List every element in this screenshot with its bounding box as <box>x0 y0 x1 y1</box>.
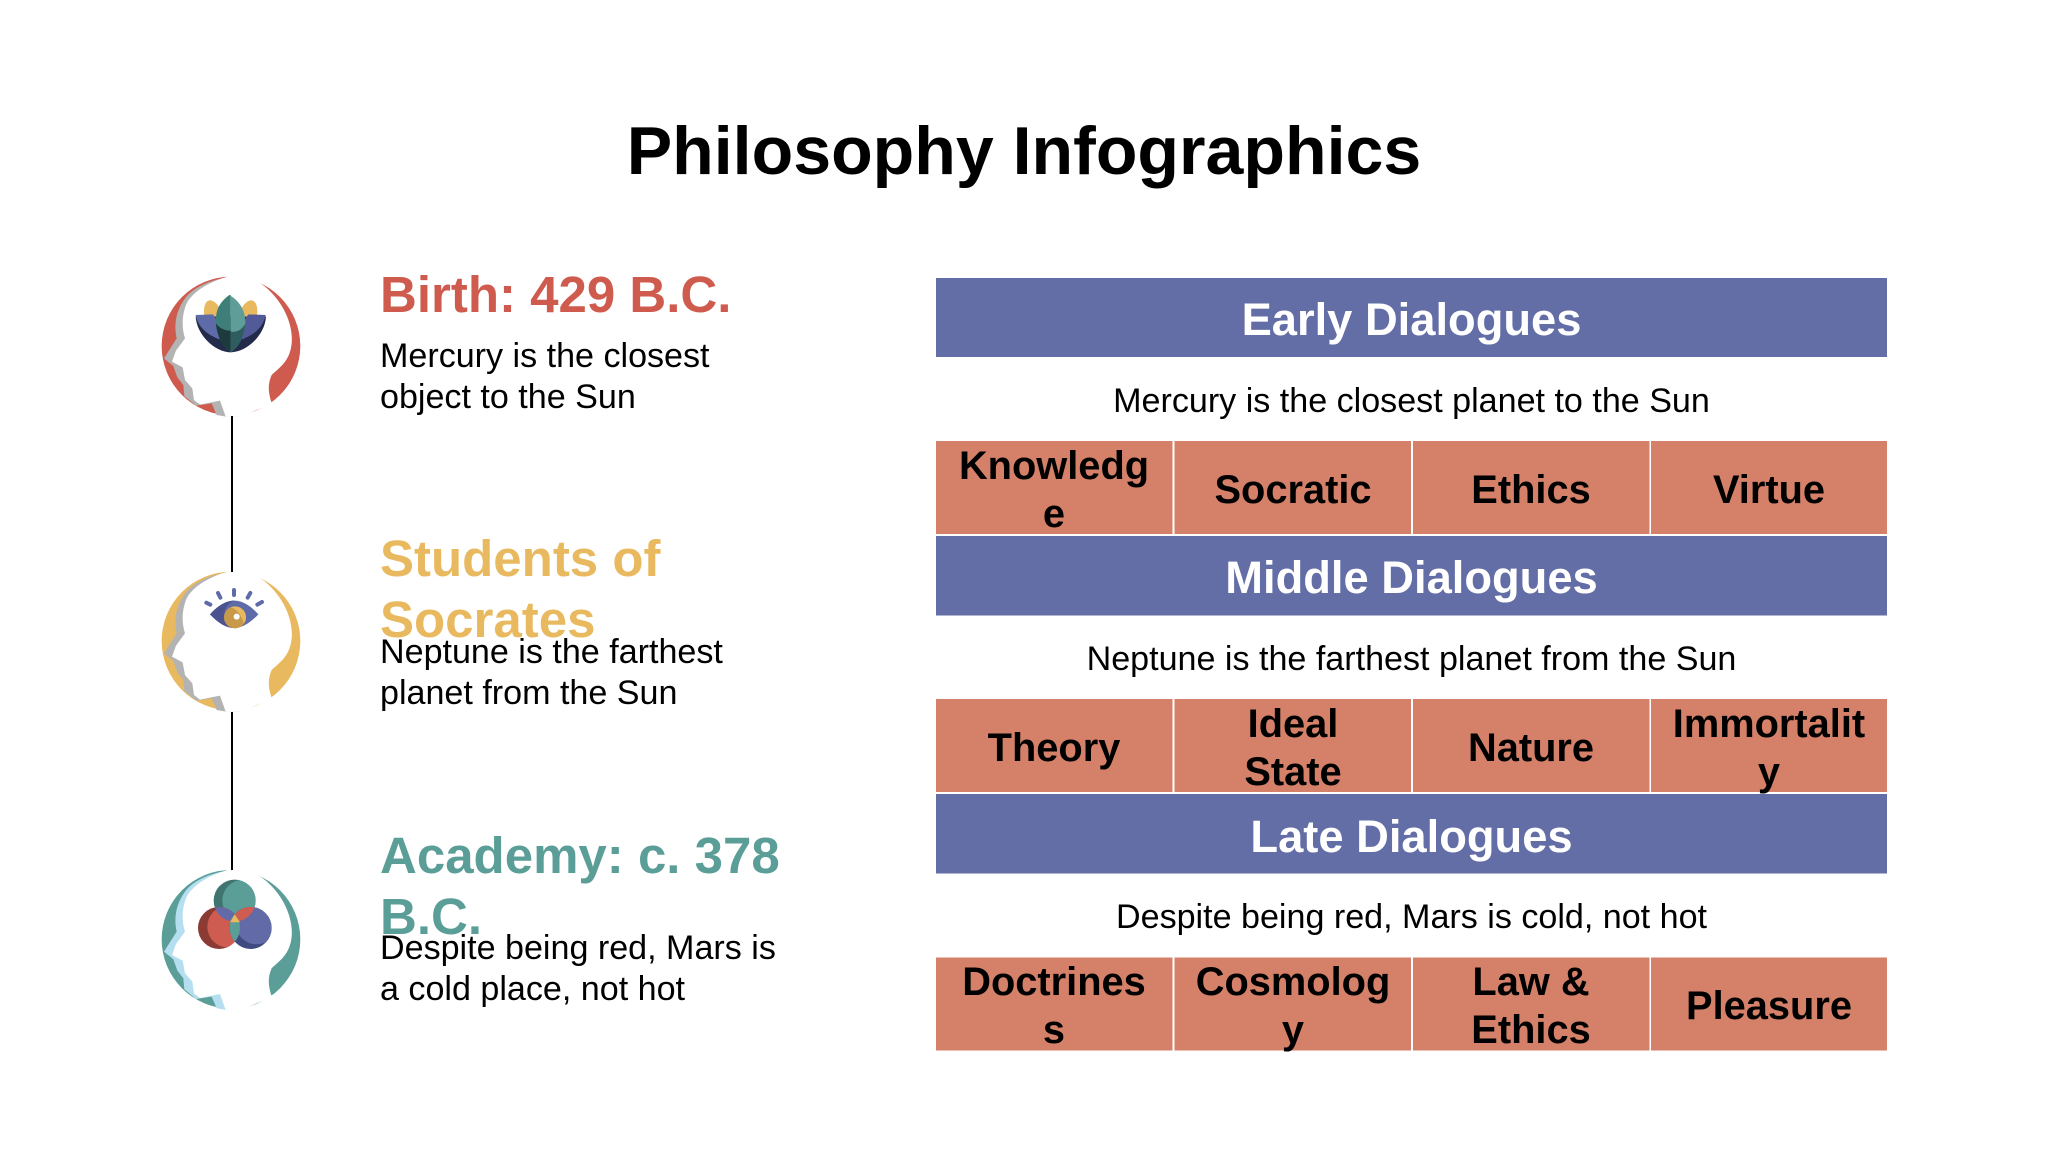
topic cells: early dialogues: Socratic <box>1214 468 1372 512</box>
topic cells: middle dialogues: Ideal <box>1248 702 1338 746</box>
text block: academy <box>380 827 780 1008</box>
text block: students of Socrates <box>380 530 723 712</box>
topic cells: late dialogues: Law & <box>1472 960 1590 1004</box>
text block: students of Socrates: Socrates <box>380 591 595 648</box>
topic cells: middle dialogues <box>936 699 1887 794</box>
heading band: early dialogues: Early Dialogues <box>1242 294 1581 345</box>
topic cells: late dialogues <box>936 958 1887 1052</box>
topic cells: middle dialogues: State <box>1244 750 1342 794</box>
panel: early dialogues <box>936 278 1887 536</box>
topic cells: late dialogues: Pleasure <box>1686 984 1852 1028</box>
title: Philosophy Infographics <box>627 113 1421 189</box>
description: middle dialogues: Neptune is the farthest planet from the Sun <box>1087 640 1736 678</box>
heading band: early dialogues <box>936 278 1887 357</box>
topic cells: early dialogues: Knowledg <box>959 444 1149 488</box>
topic cells: early dialogues: e <box>1043 492 1065 536</box>
text block: students of Socrates: planet from the Sun <box>380 674 677 712</box>
topic cells: late dialogues: Cosmolog <box>1196 960 1390 1004</box>
icon: head with lotus <box>162 275 300 417</box>
panel: middle dialogues <box>936 536 1887 794</box>
text block: birth: Birth: 429 B.C. <box>380 266 731 323</box>
topic cells: middle dialogues: Theory <box>988 726 1120 770</box>
text block: academy: B.C. <box>380 888 482 945</box>
panel: late dialogues <box>936 794 1887 1052</box>
text block: birth: Mercury is the closest <box>380 337 710 375</box>
text block: birth <box>380 266 731 416</box>
description: early dialogues: Mercury is the closest planet to the Sun <box>1113 382 1710 420</box>
topic cells: late dialogues: y <box>1282 1008 1304 1052</box>
topic cells: late dialogues: Doctrines <box>962 960 1146 1004</box>
heading band: late dialogues: Late Dialogues <box>1250 811 1573 862</box>
icon: head with eye <box>162 570 300 712</box>
heading band: middle dialogues: Middle Dialogues <box>1225 552 1598 603</box>
text block: students of Socrates: Students of <box>380 530 661 587</box>
topic cells: early dialogues: Virtue <box>1713 468 1825 512</box>
heading band: middle dialogues <box>936 536 1887 616</box>
topic cells: middle dialogues: Nature <box>1468 726 1594 770</box>
text block: academy: a cold place, not hot <box>380 970 686 1008</box>
text block: students of Socrates: Neptune is the farthest <box>380 633 723 671</box>
text block: academy: Despite being red, Mars is <box>380 929 776 967</box>
timeline connector: birth to students <box>231 416 233 572</box>
description: late dialogues: Despite being red, Mars is cold, not hot <box>1116 898 1708 936</box>
text block: birth: object to the Sun <box>380 378 636 416</box>
topic cells: middle dialogues: Immortalit <box>1673 702 1865 746</box>
topic cells: early dialogues: Ethics <box>1471 468 1591 512</box>
topic cells: early dialogues <box>936 441 1887 536</box>
topic cells: middle dialogues: y <box>1758 750 1780 794</box>
icon: head with overlapping circles <box>162 868 300 1010</box>
heading band: late dialogues <box>936 794 1887 874</box>
topic cells: late dialogues: Ethics <box>1471 1008 1591 1052</box>
timeline connector: students to academy <box>231 712 233 870</box>
text block: academy: Academy: c. 378 <box>380 827 780 884</box>
topic cells: late dialogues: s <box>1043 1008 1065 1052</box>
